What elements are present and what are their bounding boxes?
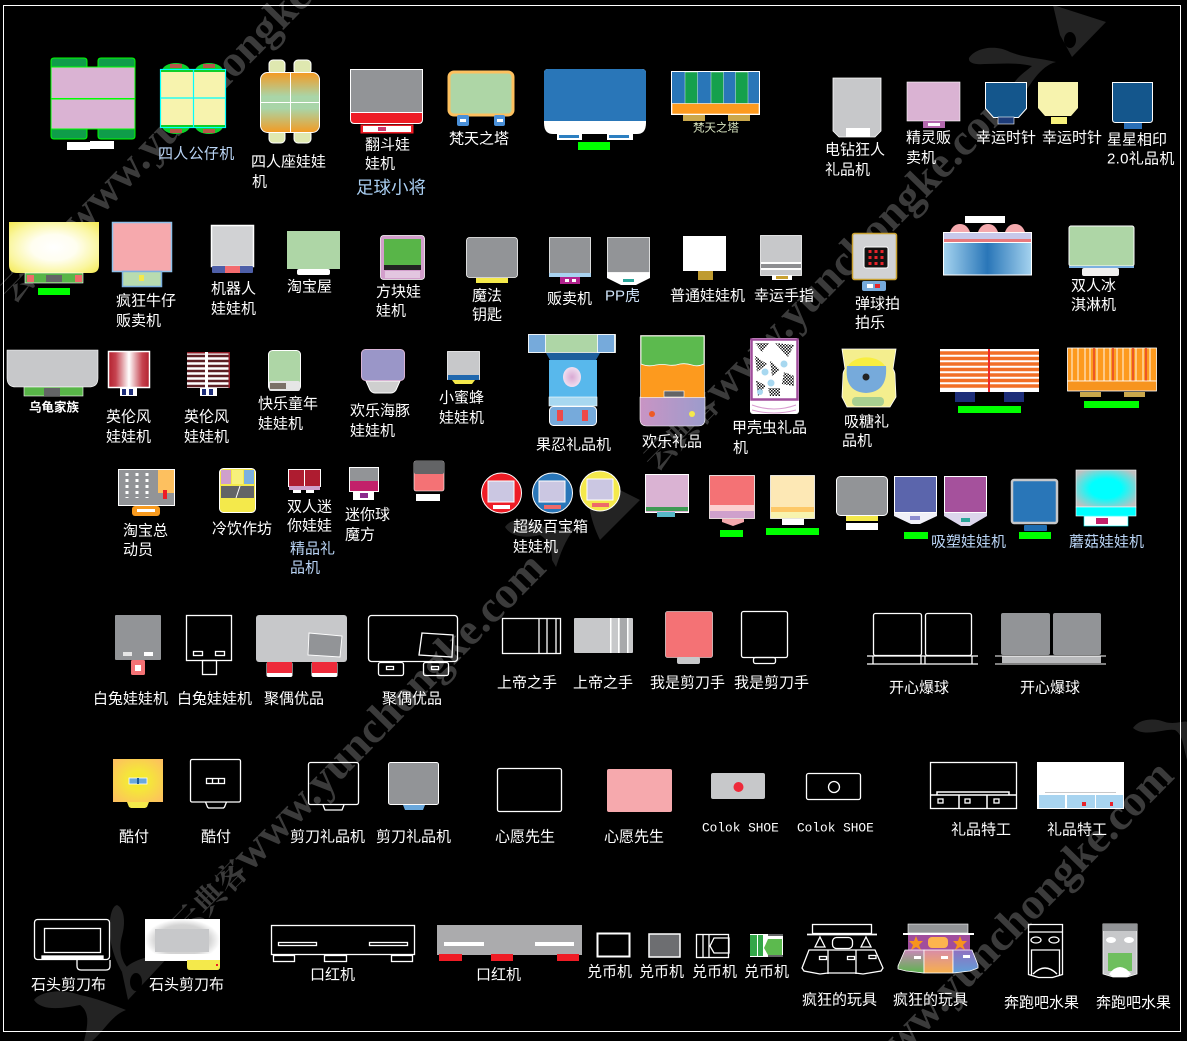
- machine: 英伦风 stripes: [187, 352, 230, 396]
- label: 星星相印2.0礼品机: 星星相印: [1107, 131, 1167, 148]
- machine: 双人迷你娃娃: [288, 470, 320, 493]
- machine: 疯狂牛仔: [112, 222, 172, 286]
- label: 弹球拍拍乐: 拍乐: [855, 314, 885, 331]
- label: 兑币机: 兑币机: [692, 963, 737, 980]
- label: 剪刀礼品机: 剪刀礼品机: [376, 828, 451, 845]
- label: 四人座娃娃机: [251, 153, 326, 190]
- label: 白兔娃娃机: 白兔娃娃机: [177, 690, 252, 707]
- label: 超级百宝箱娃娃机: 超级百宝箱: [513, 518, 588, 535]
- label: 奔跑吧水果: 奔跑吧水果: [1096, 994, 1171, 1011]
- label: 淘宝总动员: 淘宝总: [123, 522, 168, 539]
- machine: 精灵贩卖机: [907, 82, 960, 128]
- label: 甲壳虫礼品机: 机: [733, 439, 748, 456]
- machine: 剪刀礼品机 outline: [308, 762, 358, 810]
- label: 石头剪刀布: 石头剪刀布: [149, 976, 224, 993]
- label: 淘宝总动员: [123, 522, 168, 558]
- label: 双人冰淇淋机: [1071, 277, 1116, 313]
- label: 翻斗娃娃机: [365, 136, 410, 172]
- label: 上帝之手: 上帝之手: [497, 674, 557, 691]
- label: 开心爆球: 开心爆球: [1020, 679, 1080, 696]
- machine: 奔跑吧水果 outline: [1028, 924, 1062, 978]
- machine: four-person doll (green): [51, 58, 135, 150]
- label: 心愿先生: 心愿先生: [495, 828, 555, 845]
- label: 奔跑吧水果: 奔跑吧水果: [1004, 994, 1079, 1011]
- label: 甲壳虫礼品机: 甲壳虫礼品: [732, 419, 807, 436]
- label: 吸塑娃娃机: 吸塑娃娃机: [931, 533, 1006, 550]
- label: 蘑菇娃娃机: 蘑菇娃娃机: [1069, 533, 1144, 550]
- label: 贩卖机: 贩卖机: [547, 290, 592, 307]
- machine: 机器人: [212, 226, 254, 273]
- machine: orange stripes vertical: [1068, 348, 1156, 408]
- machine: four-person yellow: [160, 63, 226, 134]
- label: 魔法钥匙: [472, 287, 502, 323]
- machine: 礼品特工 color: [1037, 762, 1124, 809]
- machine: 贩卖机: [549, 238, 591, 284]
- label: 兑币机: 兑币机: [744, 963, 789, 980]
- label: 冷饮作坊: 冷饮作坊: [212, 520, 272, 537]
- label: 疯狂的玩具: 疯狂的玩具: [802, 991, 877, 1008]
- label: 淘宝屋: 淘宝屋: [287, 278, 332, 295]
- machine: 迷你球魔方: [350, 468, 378, 500]
- machine: gray rounded: [836, 476, 888, 530]
- label: 电钻狂人礼品机: 礼品机: [825, 161, 870, 178]
- machine: 聚偶优品 gray: [256, 615, 347, 677]
- machine: 开心爆球 gray: [995, 613, 1106, 664]
- label: Colok SHOE: Colok SHOE: [797, 820, 874, 835]
- label: 电钻狂人礼品机: [825, 141, 885, 178]
- machine: 口红机 outline: [272, 926, 414, 962]
- label: 英伦风娃娃机: 娃娃机: [106, 428, 151, 445]
- label: 双人迷你娃娃: [287, 498, 332, 534]
- machine: 聚偶优品 outline: [368, 616, 458, 676]
- label: 英伦风娃娃机: 娃娃机: [184, 428, 229, 445]
- machine: 弹球拍拍乐: [852, 234, 896, 291]
- machine: pink: [646, 474, 688, 517]
- machine: blue white: [544, 69, 646, 150]
- machine: 酷付 yellow: [113, 759, 163, 808]
- label: 精品礼品机: 精品礼: [290, 540, 335, 557]
- label: 口红机: 口红机: [310, 966, 355, 983]
- machine: 淘宝总动员: [118, 470, 174, 516]
- label: 英伦风娃娃机: 英伦风: [184, 407, 229, 425]
- label: 精灵贩卖机: [906, 129, 951, 166]
- machine: Colok SHOE gray: [711, 773, 765, 799]
- label: 双人冰淇淋机: 淇淋机: [1071, 296, 1116, 313]
- label: 吸糖礼品机: [842, 413, 889, 449]
- machine: 吸糖礼品机: [842, 349, 896, 407]
- label: 迷你球魔方: 魔方: [345, 526, 375, 543]
- machine: 白兔 outline: [186, 616, 232, 674]
- machine: purple: [944, 476, 987, 526]
- label: 精品礼品机: 品机: [290, 559, 320, 576]
- machine: Colok SHOE outline: [806, 774, 860, 800]
- label: 疯狂牛仔贩卖机: 疯狂牛仔: [116, 292, 176, 309]
- label: 疯狂牛仔贩卖机: [116, 292, 176, 329]
- machine: 星星相印: [1112, 82, 1152, 129]
- machine: 兑币机 green: [750, 934, 783, 957]
- label: 幸运手指: 幸运手指: [754, 287, 814, 304]
- machine: 上帝之手 outline: [502, 618, 560, 654]
- label: 疯狂牛仔贩卖机: 贩卖机: [116, 312, 161, 329]
- label: 机器人娃娃机: 娃娃机: [211, 300, 256, 317]
- label: 超级百宝箱娃娃机: [513, 518, 588, 555]
- machine: four-person orange gradient: [260, 60, 320, 143]
- label: 兑币机: 兑币机: [639, 963, 684, 980]
- label: 双人迷你娃娃: 双人迷: [287, 498, 332, 515]
- label: 甲壳虫礼品机: [732, 419, 807, 456]
- label: 电钻狂人礼品机: 电钻狂人: [825, 141, 885, 158]
- label: 魔法钥匙: 魔法: [472, 287, 502, 304]
- machine: 超级百宝箱 yellow: [580, 471, 620, 511]
- machine: 方块娃娃机: [380, 236, 424, 280]
- label: 快乐童年娃娃机: 快乐童年: [258, 394, 318, 412]
- label: 四人座娃娃机: 机: [252, 173, 267, 190]
- label: 快乐童年娃娃机: [258, 394, 318, 432]
- label: 礼品特工: 礼品特工: [1047, 821, 1107, 838]
- label: 翻斗娃娃机: 娃机: [365, 155, 395, 172]
- label: 弹球拍拍乐: [855, 295, 900, 331]
- label: 小蜜蜂娃娃机: [439, 389, 484, 426]
- machine: 我是剪刀手 red: [666, 612, 712, 664]
- machine: 梵天之塔 stripes: [672, 72, 760, 121]
- label: 石头剪刀布: 石头剪刀布: [31, 976, 106, 993]
- label: 机器人娃娃机: [211, 280, 256, 317]
- machine: 英伦风 red: [108, 352, 150, 396]
- label: Colok SHOE: Colok SHOE: [702, 820, 779, 835]
- label: 上帝之手: 上帝之手: [573, 674, 633, 691]
- machine: yellow glow: [9, 222, 99, 295]
- machine: 白兔 gray: [115, 615, 161, 675]
- label: 酷付: 酷付: [201, 828, 231, 845]
- machine: 梵天之塔 orange frame: [449, 72, 513, 126]
- label: 方块娃娃机: 方块娃: [376, 283, 421, 300]
- label: 小蜜蜂娃娃机: 小蜜蜂: [439, 389, 484, 406]
- label: 足球小将: 足球小将: [356, 177, 426, 197]
- machine: 魔法钥匙: [466, 238, 518, 283]
- label: 白兔娃娃机: 白兔娃娃机: [93, 690, 168, 707]
- machine: 石头剪刀布 color: [145, 919, 220, 970]
- machine: 电钻狂人: [833, 78, 881, 137]
- machine: cream: [766, 476, 819, 535]
- machine: 幸运时针 navy: [986, 82, 1026, 124]
- label: 英伦风娃娃机: [184, 407, 229, 445]
- label: 欢乐海豚娃娃机: [350, 402, 410, 439]
- label: 梵天之塔: 梵天之塔: [449, 130, 509, 147]
- machine: 普通娃娃机: [683, 236, 726, 280]
- label: 吸糖礼品机: 吸糖礼: [844, 413, 889, 430]
- machine: orange stripes double: [940, 349, 1039, 413]
- machine: 疯狂的玩具 color: [898, 924, 978, 973]
- machine: 小蜜蜂: [448, 352, 480, 384]
- label: 开心爆球: 开心爆球: [889, 679, 949, 696]
- machine: 心愿先生 pink: [607, 769, 672, 812]
- machine: 开心爆球 outline: [867, 614, 978, 664]
- machine: 淘宝屋: [287, 231, 340, 275]
- machine: 甲壳虫礼品机: [750, 338, 799, 414]
- machine: 超级百宝箱 blue: [532, 473, 572, 513]
- label: 欢乐海豚娃娃机: 欢乐海豚: [350, 402, 410, 419]
- label: 迷你球魔方: 迷你球: [345, 506, 390, 523]
- label: 礼品特工: 礼品特工: [951, 821, 1011, 838]
- label: 魔法钥匙: 钥匙: [472, 306, 502, 323]
- label: 欢乐海豚娃娃机: 娃娃机: [350, 422, 395, 439]
- machine: 兑币机 lines: [696, 934, 729, 958]
- machine: 上帝之手 gray: [574, 618, 633, 653]
- label: 幸运时针: 幸运时针: [976, 129, 1036, 146]
- machine: 兑币机 outline: [598, 934, 630, 956]
- label: 快乐童年娃娃机: 娃娃机: [258, 415, 303, 432]
- label: 双人迷你娃娃: 你娃娃: [287, 517, 332, 534]
- label: 机器人娃娃机: 机器人: [211, 280, 256, 297]
- label: 翻斗娃娃机: 翻斗娃: [365, 136, 410, 153]
- machine: 口红机 gray: [437, 925, 582, 961]
- machine: red band: [710, 476, 754, 537]
- label: 疯狂的玩具: 疯狂的玩具: [893, 991, 968, 1008]
- label: 兑币机: 兑币机: [587, 963, 632, 980]
- machine: 果忍礼品机: [528, 334, 616, 426]
- machine: 我是剪刀手 outline: [742, 612, 788, 664]
- label: 精灵贩卖机: 卖机: [906, 149, 936, 166]
- machine: 双人冰淇淋机: [1069, 226, 1134, 276]
- machine: 翻斗娃娃机: [350, 70, 422, 134]
- label: 我是剪刀手: 我是剪刀手: [734, 674, 809, 691]
- label: 双人冰淇淋机: 双人冰: [1071, 277, 1116, 294]
- label: 四人座娃娃机: 四人座娃娃: [251, 153, 326, 170]
- label: 英伦风娃娃机: [106, 407, 151, 445]
- label: 心愿先生: 心愿先生: [604, 828, 664, 845]
- label: PP虎: PP虎: [605, 287, 640, 304]
- machine: 冷饮作坊: [220, 468, 256, 512]
- label: 弹球拍拍乐: 弹球拍: [855, 295, 900, 312]
- machine: 超级百宝箱 red: [482, 473, 522, 513]
- label: 四人公仔机: 四人公仔机: [158, 145, 235, 162]
- machine: 欢乐海豚: [362, 350, 404, 393]
- machine: red small: [414, 461, 444, 501]
- label: 星星相印2.0礼品机: 2.0礼品机: [1107, 150, 1175, 167]
- machine: 奔跑吧水果 color: [1103, 924, 1137, 977]
- machine: 双人 blue: [944, 216, 1032, 275]
- machine: 兑币机 gray: [649, 934, 680, 957]
- label: 方块娃娃机: [376, 283, 421, 319]
- machine: 酷付 outline: [190, 760, 240, 808]
- machine: blue framed: [1012, 480, 1057, 539]
- label: 幸运时针: 幸运时针: [1042, 129, 1102, 146]
- watermarks: 云典客www.yunchongke.com: [628, 75, 1027, 480]
- label: 迷你球魔方: [345, 506, 390, 543]
- watermarks: 云典客www.yunchongke.com: [156, 542, 555, 947]
- label: 英伦风娃娃机: 英伦风: [106, 407, 151, 425]
- label: 欢乐礼品: 欢乐礼品: [642, 433, 702, 450]
- machine: indigo: [894, 476, 937, 539]
- label: 超级百宝箱娃娃机: 娃娃机: [513, 538, 558, 555]
- machine: 幸运手指: [760, 236, 802, 280]
- machine: 疯狂的玩具 outline: [802, 924, 883, 974]
- label: 梵天之塔 small: 梵天之塔: [693, 120, 739, 134]
- label: 星星相印2.0礼品机: [1107, 131, 1175, 167]
- machine: 剪刀礼品机 gray: [388, 762, 438, 810]
- label: 口红机: 口红机: [476, 966, 521, 983]
- machine: 欢乐礼品: [640, 336, 705, 426]
- machine: 蘑菇娃娃机: [1076, 470, 1136, 526]
- machine: 石头剪刀布 outline: [34, 920, 110, 970]
- label: 精灵贩卖机: 精灵贩: [906, 129, 951, 146]
- label: 乌龟家族: 乌龟家族: [29, 399, 80, 414]
- label: 吸糖礼品机: 品机: [842, 432, 872, 449]
- machine: 幸运时针 yellow: [1038, 82, 1078, 124]
- label: 方块娃娃机: 娃机: [376, 302, 406, 319]
- label: 小蜜蜂娃娃机: 娃娃机: [439, 409, 484, 426]
- label: 果忍礼品机: 果忍礼品机: [536, 436, 611, 453]
- label: 聚偶优品: 聚偶优品: [264, 690, 324, 707]
- label: 精品礼品机: [290, 540, 335, 576]
- machine: PP虎: [607, 238, 650, 285]
- machine: 乌龟家族: [7, 350, 98, 396]
- label: 我是剪刀手: 我是剪刀手: [650, 674, 725, 691]
- machine: 礼品特工 outline: [930, 762, 1017, 809]
- machine: 心愿先生 outline: [498, 768, 562, 812]
- label: 剪刀礼品机: 剪刀礼品机: [290, 828, 365, 845]
- label: 聚偶优品: 聚偶优品: [382, 690, 442, 707]
- label: 酷付: 酷付: [119, 828, 149, 845]
- label: 淘宝总动员: 动员: [123, 541, 153, 558]
- machine: 快乐童年: [268, 350, 300, 391]
- label: 普通娃娃机: 普通娃娃机: [670, 287, 745, 304]
